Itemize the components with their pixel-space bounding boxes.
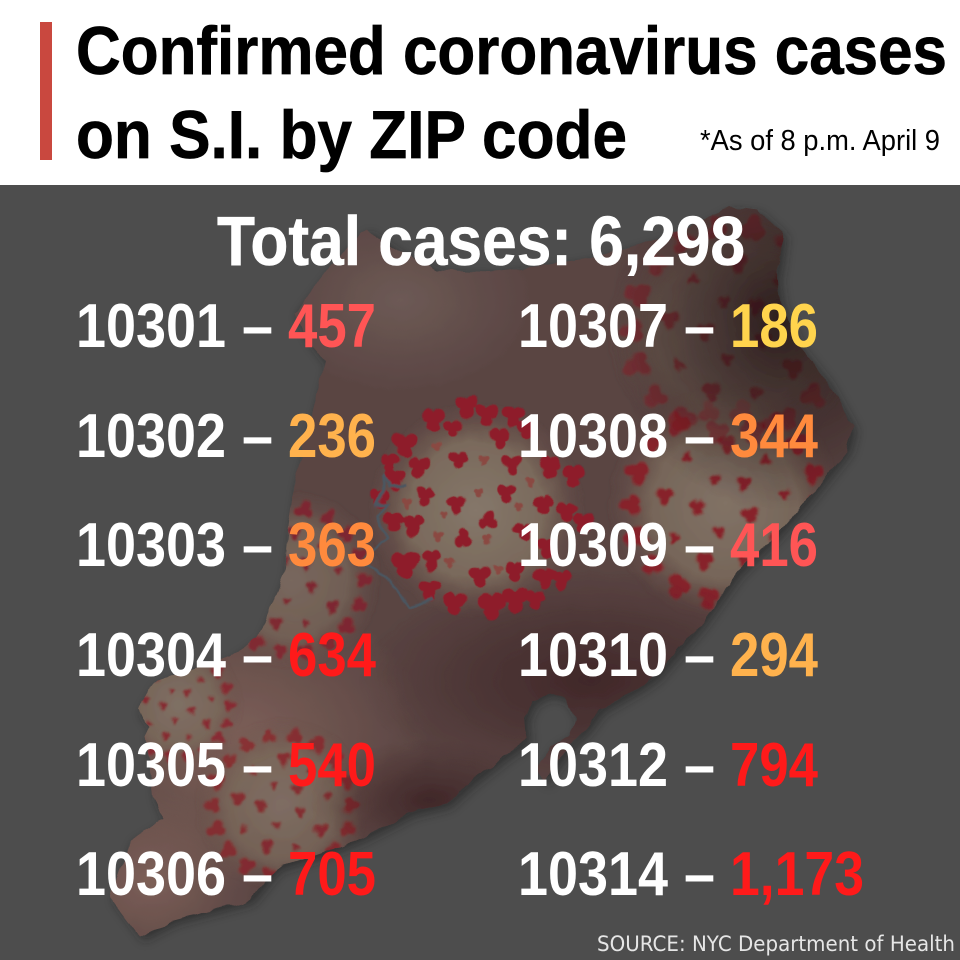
water inlet	[363, 475, 433, 607]
row 10314	[518, 840, 864, 909]
row 10304: –	[242, 621, 273, 690]
row 10304	[76, 621, 376, 690]
row 10308: 344	[730, 402, 818, 471]
central virus	[363, 396, 594, 620]
row 10314: 1,173	[730, 840, 864, 909]
row 10305: –	[242, 731, 273, 800]
row 10302: –	[242, 402, 273, 471]
row 10301	[76, 292, 376, 361]
row 10301: 457	[288, 292, 376, 361]
row 10301: 10301	[76, 292, 226, 361]
row 10309: –	[684, 511, 715, 580]
row 10302: 236	[288, 402, 376, 471]
row 10314: 10314	[518, 840, 668, 909]
title	[76, 13, 947, 173]
row 10309	[518, 511, 818, 580]
row 10308: –	[684, 402, 715, 471]
row 10303: 363	[288, 511, 376, 580]
row 10309: 416	[730, 511, 818, 580]
title: on S.I. by ZIP code	[76, 97, 627, 173]
row 10306: 705	[288, 840, 376, 909]
row 10306	[76, 840, 376, 909]
row 10302: 10302	[76, 402, 226, 471]
row 10305: 10305	[76, 731, 226, 800]
row 10312: 794	[730, 731, 818, 800]
row 10310: –	[684, 621, 715, 690]
row 10312: 10312	[518, 731, 668, 800]
row 10304: 634	[288, 621, 376, 690]
total cases heading: Total cases: 6,298	[217, 202, 745, 280]
row 10310	[518, 621, 818, 690]
row 10307: –	[684, 292, 715, 361]
header accent bar	[40, 22, 52, 160]
row 10303	[76, 511, 376, 580]
row 10301: –	[242, 292, 273, 361]
row 10305: 540	[288, 731, 376, 800]
row 10304: 10304	[76, 621, 226, 690]
row 10303: 10303	[76, 511, 226, 580]
row 10310: 10310	[518, 621, 668, 690]
row 10312: –	[684, 731, 715, 800]
row 10307: 10307	[518, 292, 668, 361]
row 10309: 10309	[518, 511, 668, 580]
map of Staten Island with coronavirus texture	[110, 206, 858, 940]
timestamp note: *As of 8 p.m. April 9	[700, 125, 940, 157]
row 10306: 10306	[76, 840, 226, 909]
row 10302	[76, 402, 376, 471]
row 10305	[76, 731, 376, 800]
left column of ZIP counts	[76, 292, 376, 909]
map drop shadow	[114, 211, 857, 941]
right column of ZIP counts	[518, 292, 864, 909]
row 10306: –	[242, 840, 273, 909]
header white band	[0, 0, 960, 185]
row 10314: –	[684, 840, 715, 909]
row 10310: 294	[730, 621, 818, 690]
row 10303: –	[242, 511, 273, 580]
row 10307: 186	[730, 292, 818, 361]
row 10308: 10308	[518, 402, 668, 471]
row 10308	[518, 402, 818, 471]
map land shape with viruses	[110, 206, 854, 936]
row 10307	[518, 292, 818, 361]
row 10312	[518, 731, 818, 800]
